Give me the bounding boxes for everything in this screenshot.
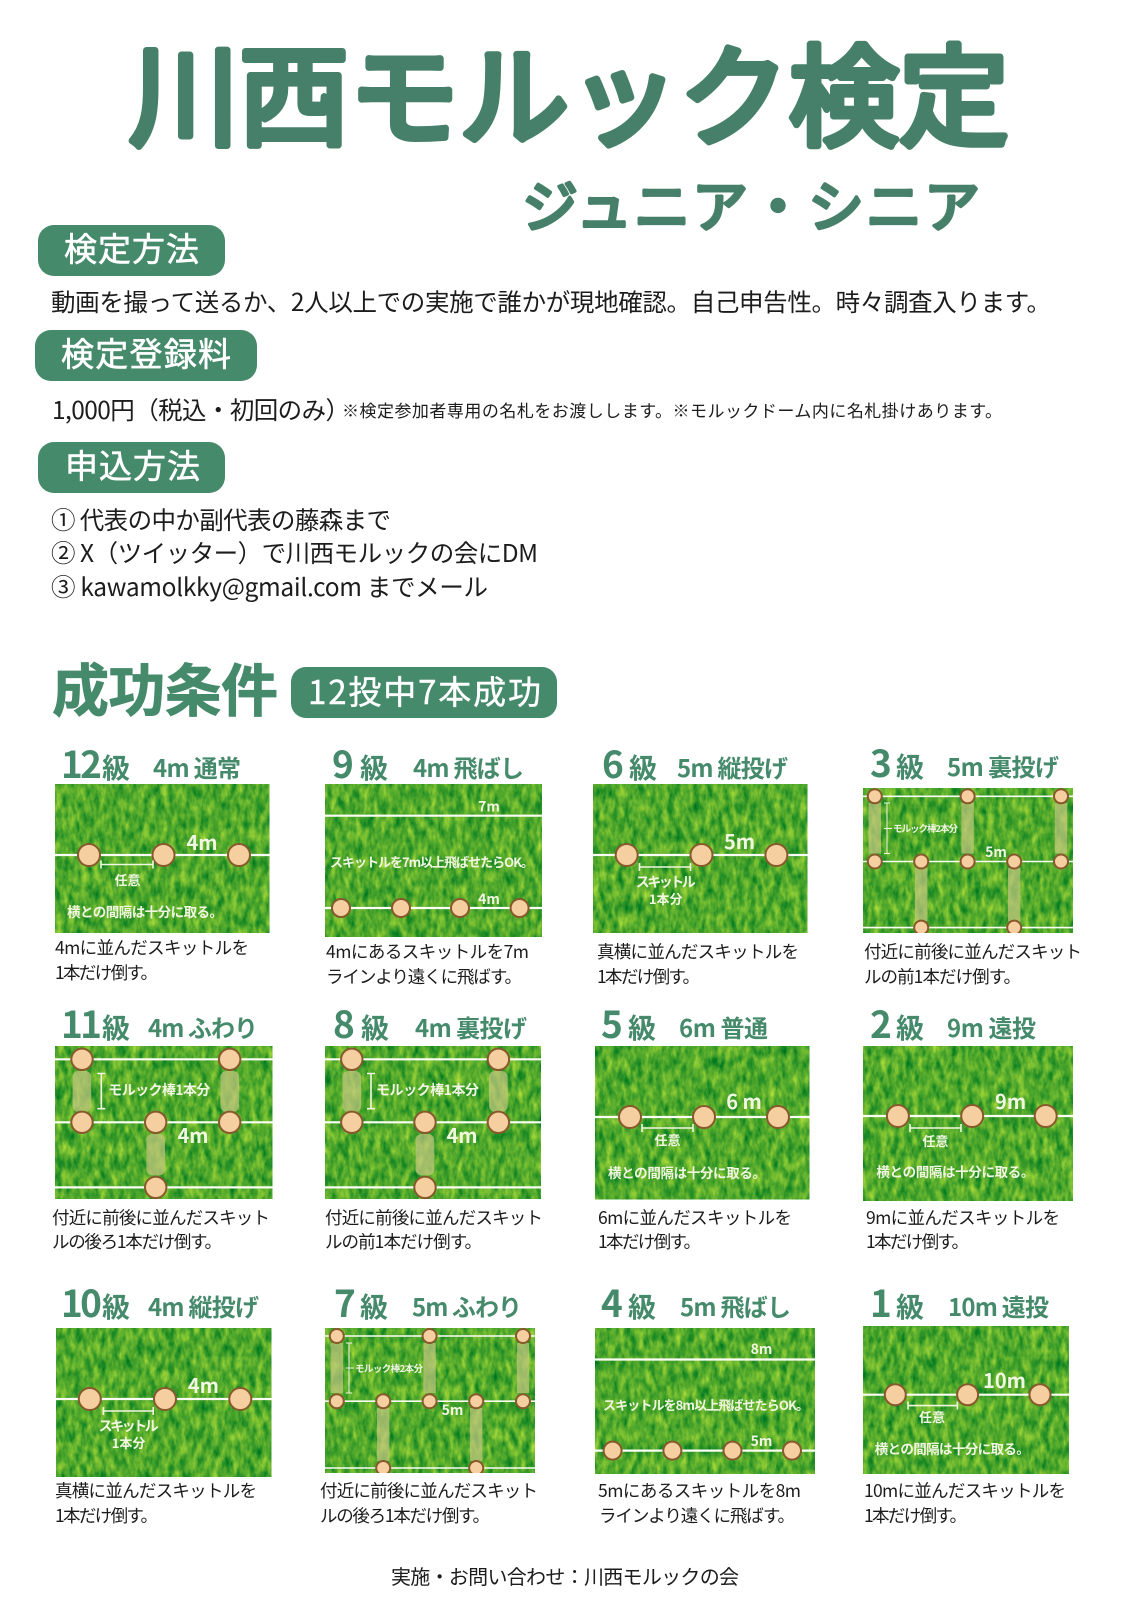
section pill: 検定方法 xyxy=(38,223,225,276)
section pill: 申込方法 xyxy=(38,440,225,493)
heading: 6m 普通 xyxy=(679,1009,768,1044)
caption xyxy=(866,1205,1060,1254)
field diagram: 横との間隔は十分に取る。 xyxy=(67,901,223,921)
heading: 級 xyxy=(629,747,657,787)
panel: 3級 xyxy=(863,734,1082,989)
field diagram: モルック棒1本分 xyxy=(376,1080,479,1100)
field diagram xyxy=(325,784,542,937)
text: 登録料: ※検定参加者専用の名札をお渡しします。※モルックドーム内に名札掛けあります。 xyxy=(342,397,1002,422)
heading xyxy=(334,1274,522,1328)
field diagram: 4m xyxy=(186,827,218,856)
field diagram: スキットルを7m以上飛ばせたらOK。 xyxy=(330,852,534,871)
caption: 1本だけ倒す。 xyxy=(598,1229,701,1254)
field diagram: 4m xyxy=(177,1120,209,1149)
panel: 2級 xyxy=(863,995,1073,1254)
panel: 6級 xyxy=(593,735,808,989)
field diagram: 任意 xyxy=(919,1407,945,1426)
caption xyxy=(326,939,529,989)
field diagram xyxy=(593,784,808,933)
field diagram: スキットルを8m以上飛ばせたらOK。 xyxy=(603,1395,809,1414)
field diagram: 横との間隔は十分に取る。 xyxy=(608,1162,766,1182)
field diagram: 任意 xyxy=(114,870,141,889)
section pill: 申込方法: 申込方法 xyxy=(65,440,200,488)
heading: 10m 遠投 xyxy=(948,1288,1049,1323)
heading: 4m 裏投げ xyxy=(415,1009,527,1044)
field diagram: 10m xyxy=(983,1365,1026,1394)
caption xyxy=(864,939,1082,989)
heading: 4m 通常 xyxy=(153,749,241,784)
caption: 9mに並んだスキットルを xyxy=(866,1205,1060,1230)
field diagram: スキットル xyxy=(99,1416,159,1436)
heading: 5m 飛ばし xyxy=(680,1288,791,1323)
heading: 6 xyxy=(602,735,624,789)
field diagram: 1本分 xyxy=(649,889,683,908)
field diagram xyxy=(325,1046,541,1199)
caption: 真横に並んだスキットルを xyxy=(55,1478,257,1503)
field diagram: モルック棒2本分 xyxy=(893,821,958,835)
caption: 1本だけ倒す。 xyxy=(597,964,700,989)
heading xyxy=(601,995,768,1049)
field diagram: 6 m xyxy=(726,1086,762,1115)
field diagram: 1本分 xyxy=(112,1433,145,1452)
field diagram xyxy=(595,1328,815,1474)
field diagram: 4m xyxy=(188,1370,219,1399)
field diagram: 横との間隔は十分に取る。 xyxy=(875,1438,1030,1458)
caption: 5mにあるスキットルを8m xyxy=(598,1478,801,1503)
caption: 付近に前後に並んだスキット xyxy=(325,1205,543,1230)
field diagram: 7m xyxy=(478,797,500,817)
panel: 10級 xyxy=(55,1274,272,1528)
heading: 4 xyxy=(601,1274,623,1328)
caption: 1本だけ倒す。 xyxy=(866,1229,969,1254)
heading: 4m ふわり xyxy=(148,1009,258,1044)
caption: 1本だけ倒す。 xyxy=(864,1503,967,1528)
caption: 4mにあるスキットルを7m xyxy=(326,939,529,964)
section pill: 検定登録料: 検定登録料 xyxy=(61,328,231,376)
heading xyxy=(61,735,241,789)
pill: 12投中7本成功: 12投中7本成功 xyxy=(308,666,541,714)
caption xyxy=(320,1478,538,1528)
heading: 級 xyxy=(896,746,924,786)
heading xyxy=(870,1274,1049,1328)
heading: 5 xyxy=(601,995,623,1049)
caption: 付近に前後に並んだスキット xyxy=(320,1478,538,1503)
text: 検定方法 body: 動画を撮って送るか、2人以上での実施で誰かが現地確認。自己申告性。時々調査入ります。 xyxy=(51,284,1051,319)
heading: 級 xyxy=(361,1007,389,1047)
heading: 級 xyxy=(896,1007,924,1047)
field diagram: 8m xyxy=(751,1339,772,1359)
field diagram xyxy=(595,1046,810,1200)
field diagram: スキットル xyxy=(636,872,696,892)
panel: 9級 xyxy=(325,735,542,989)
heading: 級 xyxy=(628,1286,656,1326)
heading: 7 xyxy=(334,1274,356,1328)
caption xyxy=(325,1205,543,1254)
caption: ルの後ろ1本だけ倒す。 xyxy=(320,1503,490,1528)
caption: 1本だけ倒す。 xyxy=(55,960,158,985)
heading: 5m 縦投げ xyxy=(677,749,788,784)
heading xyxy=(870,995,1036,1049)
panel: 1級 xyxy=(863,1274,1069,1528)
field diagram xyxy=(55,784,270,933)
field diagram xyxy=(863,788,1073,935)
caption: 真横に並んだスキットルを xyxy=(597,939,799,964)
caption xyxy=(598,1205,792,1254)
heading: 1 xyxy=(870,1274,892,1328)
heading: 級 xyxy=(896,1286,924,1326)
section pill: 検定方法: 検定方法 xyxy=(64,223,199,271)
caption xyxy=(864,1478,1066,1528)
caption xyxy=(598,1478,801,1528)
heading: 9m 遠投 xyxy=(947,1009,1036,1044)
caption: 4mに並んだスキットルを xyxy=(55,935,249,960)
caption: ラインより遠くに飛ばす。 xyxy=(599,1503,795,1528)
heading: 級 xyxy=(102,1286,130,1326)
field diagram: 5m xyxy=(985,842,1007,862)
panel: 12級 xyxy=(55,735,270,985)
heading: 12 xyxy=(61,735,102,789)
caption: ラインより遠くに飛ばす。 xyxy=(326,964,522,989)
panel: 4級 xyxy=(595,1274,815,1528)
heading: 級 xyxy=(360,747,388,787)
field diagram: 横との間隔は十分に取る。 xyxy=(876,1161,1034,1181)
field diagram xyxy=(55,1046,272,1199)
text: 登録料 xyxy=(52,392,1002,427)
field diagram: モルック棒1本分 xyxy=(108,1080,210,1100)
heading xyxy=(602,735,788,789)
heading: 5m 裏投げ xyxy=(947,748,1059,783)
panel: 7級 xyxy=(320,1274,538,1528)
field diagram: 5m xyxy=(751,1431,772,1451)
heading: 11 xyxy=(61,995,102,1049)
heading: 級 xyxy=(628,1007,656,1047)
field diagram: 任意 xyxy=(654,1130,681,1149)
heading: 8 xyxy=(333,995,355,1049)
caption xyxy=(597,939,799,989)
caption: 6mに並んだスキットルを xyxy=(598,1205,792,1230)
heading: 級 xyxy=(360,1286,388,1326)
list: 申込方法 xyxy=(51,502,538,604)
heading xyxy=(870,734,1059,788)
list: 申込方法: ② X（ツイッター）で川西モルックの会にDM xyxy=(51,535,538,570)
field diagram: モルック棒2本分 xyxy=(355,1361,423,1375)
heading: 成功条件: 成功条件 xyxy=(52,646,278,728)
panel: 11級 xyxy=(52,995,272,1254)
field diagram: 任意 xyxy=(922,1131,948,1150)
panel: 8級 xyxy=(325,995,543,1254)
field diagram xyxy=(56,1328,272,1477)
text: 登録料: 1,000円（税込・初回のみ） xyxy=(52,392,350,427)
heading: 2 xyxy=(870,995,892,1049)
footer: 実施・お問い合わせ：川西モルックの会 xyxy=(391,1561,739,1590)
heading: 4m 飛ばし xyxy=(413,749,524,784)
heading: 級 xyxy=(102,1007,130,1047)
caption: ルの前1本だけ倒す。 xyxy=(864,964,1021,989)
caption xyxy=(55,935,249,985)
field diagram: 4m xyxy=(478,889,500,909)
caption: ルの前1本だけ倒す。 xyxy=(325,1229,482,1254)
list: 申込方法: ③ kawamolkky@gmail.com までメール xyxy=(51,569,488,604)
field diagram xyxy=(325,1328,535,1475)
field diagram xyxy=(863,1046,1073,1201)
field diagram: 9m xyxy=(995,1086,1026,1115)
caption xyxy=(55,1478,257,1528)
field diagram: 5m xyxy=(442,1400,463,1420)
heading: 10 xyxy=(61,1274,102,1328)
caption: ルの後ろ1本だけ倒す。 xyxy=(52,1229,222,1254)
heading xyxy=(61,995,258,1049)
subtitle: ジュニア・シニア xyxy=(522,163,980,244)
list: 申込方法: ① 代表の中か副代表の藤森まで xyxy=(51,502,391,537)
heading: 3 xyxy=(870,734,892,788)
heading xyxy=(332,735,524,789)
panel: 5級 xyxy=(595,995,810,1254)
heading: 4m 縦投げ xyxy=(148,1288,259,1323)
heading xyxy=(61,1274,259,1328)
heading xyxy=(333,995,527,1049)
caption: 1本だけ倒す。 xyxy=(55,1503,158,1528)
title: 川西モルック検定 xyxy=(129,9,1009,169)
heading: 9 xyxy=(332,735,354,789)
field diagram xyxy=(863,1326,1069,1474)
caption: 付近に前後に並んだスキット xyxy=(52,1205,270,1230)
field diagram: 4m xyxy=(446,1120,478,1149)
caption: 10mに並んだスキットルを xyxy=(864,1478,1066,1503)
heading xyxy=(601,1274,791,1328)
caption xyxy=(52,1205,270,1254)
heading: 5m ふわり xyxy=(412,1288,522,1323)
section pill: 検定登録料 xyxy=(35,328,257,381)
field diagram: 5m xyxy=(724,826,755,855)
heading: 級 xyxy=(102,747,130,787)
caption: 付近に前後に並んだスキット xyxy=(864,939,1082,964)
